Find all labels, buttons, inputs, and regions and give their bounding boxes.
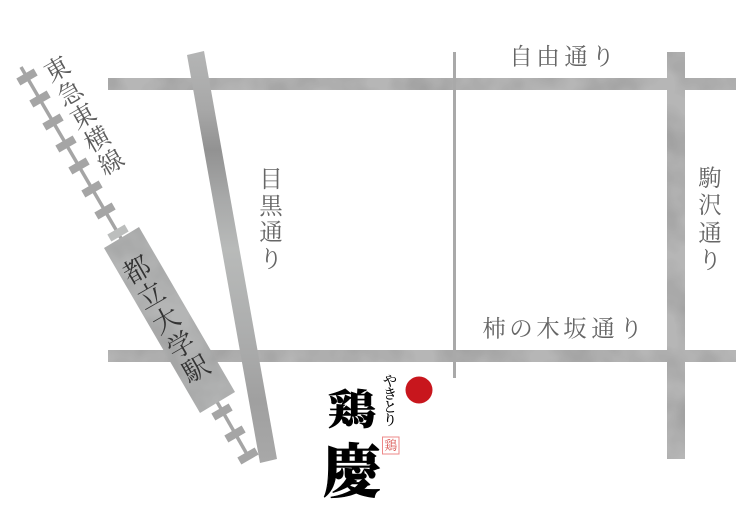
logo: 鶏慶 yakitori (323, 375, 432, 505)
label: 都立大学駅 (118, 251, 215, 390)
label: 都立大学駅: 立 (132, 276, 170, 315)
logo: 慶: 慶 (323, 440, 381, 505)
railway: 東急東横線 track north (16, 67, 129, 241)
station: 都立大学駅 (104, 227, 235, 413)
label: 東急東横線: 横 (80, 121, 115, 158)
road: 目黒通り (187, 51, 277, 463)
label: 都立大学駅: 都 (118, 251, 156, 290)
label: 東急東横線: 東 (66, 98, 101, 135)
road: 柿の木坂通り (108, 350, 736, 362)
label: 都立大学駅: 駅 (176, 350, 215, 390)
label: 自由通り: 自由通り (509, 44, 615, 70)
logo: やきとり: やきとり (383, 375, 397, 429)
label: 東急東横線 (40, 51, 129, 181)
logo: red seal: 鶏 (384, 435, 397, 454)
label: 都立大学駅: 大 (147, 301, 185, 340)
label: 都立大学駅: 学 (162, 326, 200, 365)
label: 東急東横線: 線 (94, 144, 129, 181)
label: 柿の木坂通り: 柿の木坂通り (482, 316, 643, 342)
label: 駒沢通り: 駒沢通り (697, 165, 722, 274)
label: 東急東横線: 急 (53, 75, 89, 112)
logo: 鶏: 鶏 (328, 387, 376, 433)
label: 目黒通り: 目黒通り (259, 167, 283, 273)
logo: red sun (406, 376, 432, 404)
road: thin side street (453, 52, 456, 378)
railway: track south (211, 400, 259, 464)
road: 駒沢通り (667, 52, 685, 459)
label: 東急東横線: 東 (40, 51, 75, 88)
road: 自由通り (108, 78, 736, 90)
